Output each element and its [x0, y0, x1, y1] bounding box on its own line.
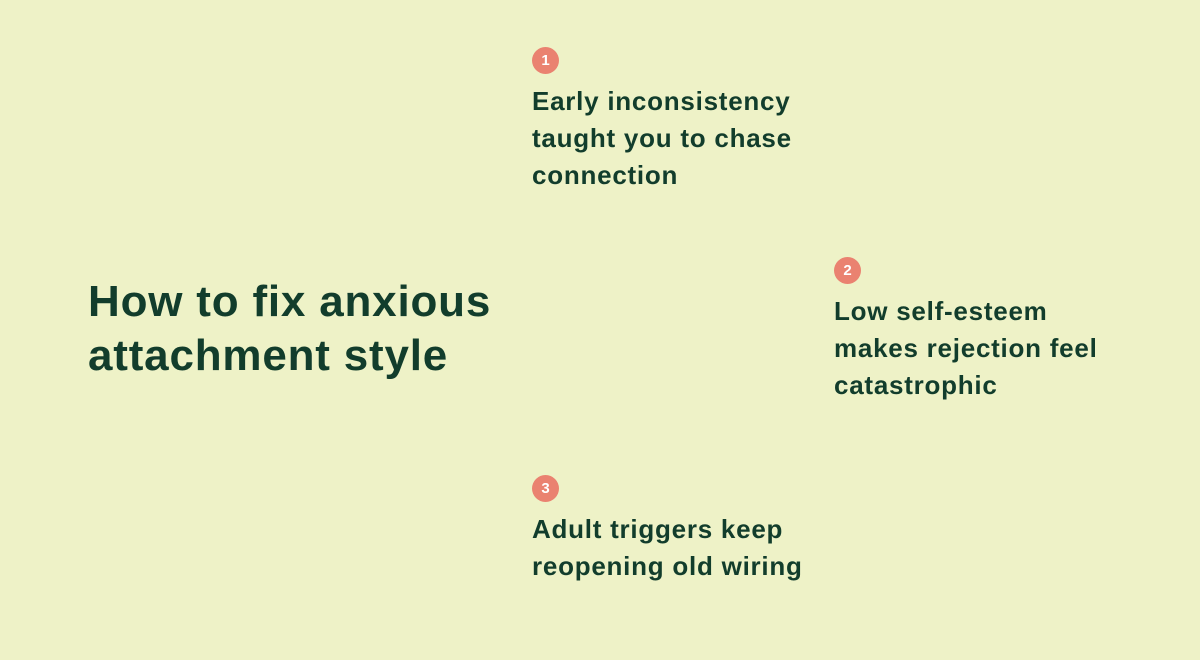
- text 2: catastrophic: [834, 370, 998, 400]
- badge 2: [834, 257, 861, 284]
- text 1: Early inconsistency: [532, 86, 790, 116]
- text 1: [532, 86, 792, 190]
- text 3: [532, 514, 803, 581]
- badge 1: [532, 47, 559, 74]
- text 1: connection: [532, 160, 678, 190]
- item 1: [532, 47, 792, 190]
- badge 1: 1: [541, 52, 550, 69]
- text 3: reopening old wiring: [532, 551, 803, 581]
- text 1: taught you to chase: [532, 123, 792, 153]
- item 3: [532, 475, 803, 581]
- badge 3: [532, 475, 559, 502]
- title: attachment style: [88, 331, 448, 380]
- badge 3: 3: [541, 480, 550, 497]
- text 2: Low self-esteem: [834, 296, 1048, 326]
- badge 2: 2: [843, 262, 852, 279]
- title: How to fix anxious: [88, 277, 491, 326]
- item 2: [834, 257, 1098, 400]
- text 2: [834, 296, 1098, 400]
- text 2: makes rejection feel: [834, 333, 1098, 363]
- title: [88, 277, 491, 380]
- text 3: Adult triggers keep: [532, 514, 783, 544]
